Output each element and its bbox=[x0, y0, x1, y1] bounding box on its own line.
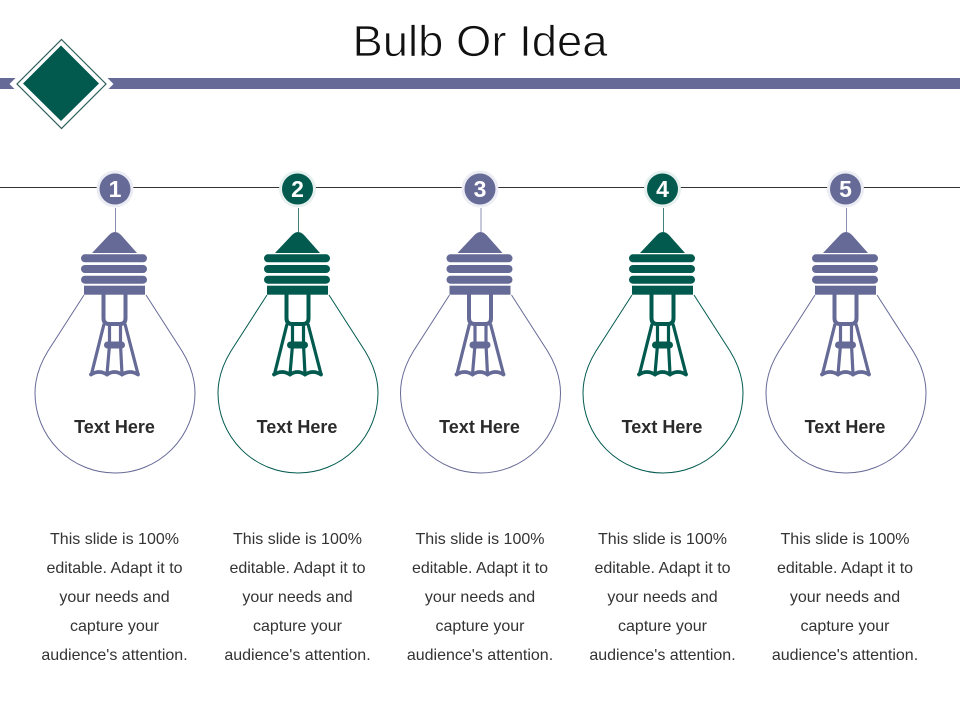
description 1: editable. Adapt it to bbox=[46, 560, 183, 577]
number badge 1 bbox=[96, 170, 134, 208]
number badge 5: 5 bbox=[839, 176, 852, 202]
description 1: This slide is 100% bbox=[50, 531, 179, 548]
bulb label 3: Text Here bbox=[439, 417, 520, 437]
description 5: editable. Adapt it to bbox=[777, 560, 913, 577]
item 5 bbox=[766, 170, 926, 664]
description 3: This slide is 100% bbox=[416, 531, 544, 548]
item 2 bbox=[218, 170, 378, 664]
item 1 bbox=[35, 170, 195, 664]
number badge 5 bbox=[827, 170, 864, 208]
description 5: audience's attention. bbox=[772, 647, 918, 664]
number badge 2: 2 bbox=[291, 176, 304, 202]
icon: bulb 2 bbox=[218, 208, 378, 473]
description 2: This slide is 100% bbox=[233, 531, 362, 548]
title: Bulb Or Idea bbox=[352, 17, 608, 66]
description 3: audience's attention. bbox=[407, 647, 553, 664]
icon: bulb 5 bbox=[766, 208, 926, 473]
description 4: editable. Adapt it to bbox=[594, 560, 731, 577]
number badge 4 bbox=[644, 170, 681, 208]
description 5: This slide is 100% bbox=[781, 531, 909, 548]
description 1: your needs and bbox=[59, 589, 170, 606]
number badge 1: 1 bbox=[109, 176, 122, 202]
description 2: audience's attention. bbox=[224, 647, 371, 664]
description 4: your needs and bbox=[607, 589, 718, 606]
description 1: capture your bbox=[70, 618, 160, 635]
description 2: your needs and bbox=[242, 589, 353, 606]
icon: header diamond bbox=[10, 32, 114, 136]
description 4: capture your bbox=[618, 618, 708, 635]
description 5 bbox=[772, 531, 918, 664]
icon: bulb 1 bbox=[35, 208, 195, 473]
description 3: editable. Adapt it to bbox=[412, 560, 548, 577]
bulb label 5: Text Here bbox=[805, 417, 885, 437]
description 2: capture your bbox=[253, 618, 343, 635]
item 4 bbox=[583, 170, 743, 664]
number badge 3 bbox=[462, 170, 498, 208]
number badge 4: 4 bbox=[656, 176, 669, 202]
description 5: capture your bbox=[801, 618, 890, 635]
bulb label 4: Text Here bbox=[622, 417, 702, 437]
description 4 bbox=[589, 531, 736, 664]
description 2: editable. Adapt it to bbox=[229, 560, 366, 577]
description 1: audience's attention. bbox=[41, 647, 188, 664]
number badge 2 bbox=[279, 170, 316, 208]
number badge 3: 3 bbox=[474, 176, 486, 202]
description 3: your needs and bbox=[425, 589, 535, 606]
bulb label 1: Text Here bbox=[74, 417, 155, 437]
header bar bbox=[0, 78, 960, 89]
connector line bbox=[0, 186, 960, 188]
description 1 bbox=[41, 531, 188, 664]
description 4: audience's attention. bbox=[589, 647, 736, 664]
bulb label 2: Text Here bbox=[257, 417, 337, 437]
description 3: capture your bbox=[436, 618, 525, 635]
icon: bulb 4 bbox=[583, 208, 743, 473]
description 3 bbox=[407, 531, 553, 664]
item 3 bbox=[400, 170, 560, 664]
description 2 bbox=[224, 531, 371, 664]
icon: bulb 3 bbox=[400, 208, 560, 473]
description 5: your needs and bbox=[790, 589, 900, 606]
description 4: This slide is 100% bbox=[598, 531, 727, 548]
